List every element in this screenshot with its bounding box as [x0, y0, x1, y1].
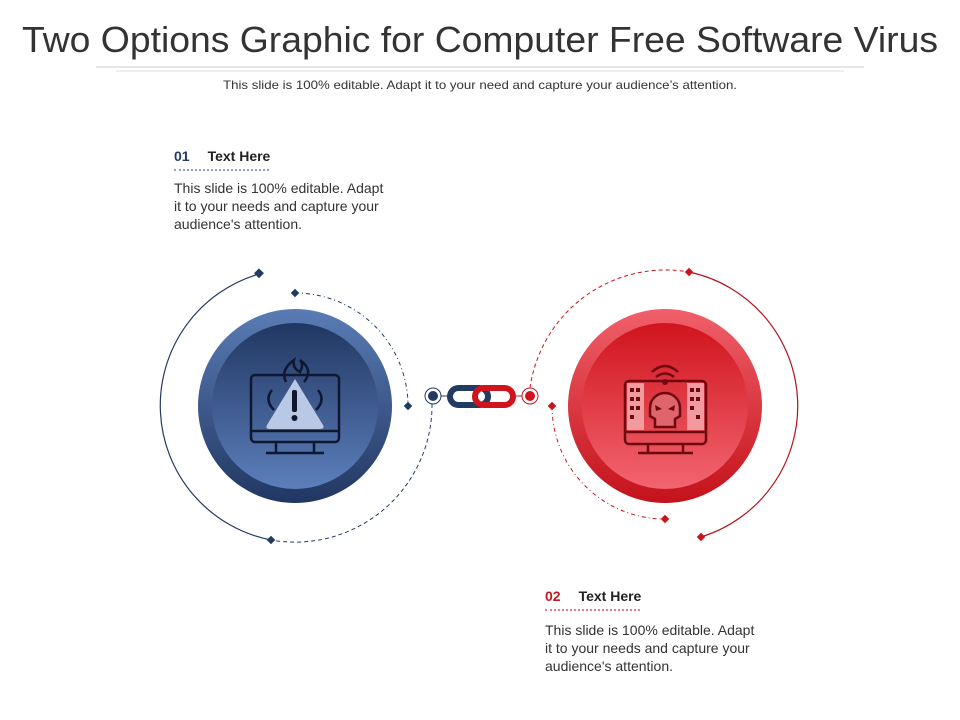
text block 02: This slide is 100% editable. Adapt it to your needs and capture your audience's attention.: [545, 622, 754, 674]
text block 01: This slide is 100% editable. Adapt it to your needs and capture your audience's attention.: [174, 180, 383, 232]
left circle with warning computer icon: [198, 309, 392, 503]
chain link connector: [425, 388, 538, 405]
title: Two Options Graphic for Computer Free Software Virus: [22, 19, 938, 60]
text block 01: [174, 148, 384, 232]
text block 01: 01 Text Here: [174, 148, 270, 164]
subtitle: This slide is 100% editable. Adapt it to your need and capture your audience’s attention.: [223, 78, 737, 92]
text block 02: 02 Text Here: [545, 588, 641, 604]
left arcs: [160, 268, 432, 544]
text block 02: [545, 588, 754, 674]
right circle with skull computer icon: [568, 309, 762, 503]
right arcs: [530, 268, 798, 541]
